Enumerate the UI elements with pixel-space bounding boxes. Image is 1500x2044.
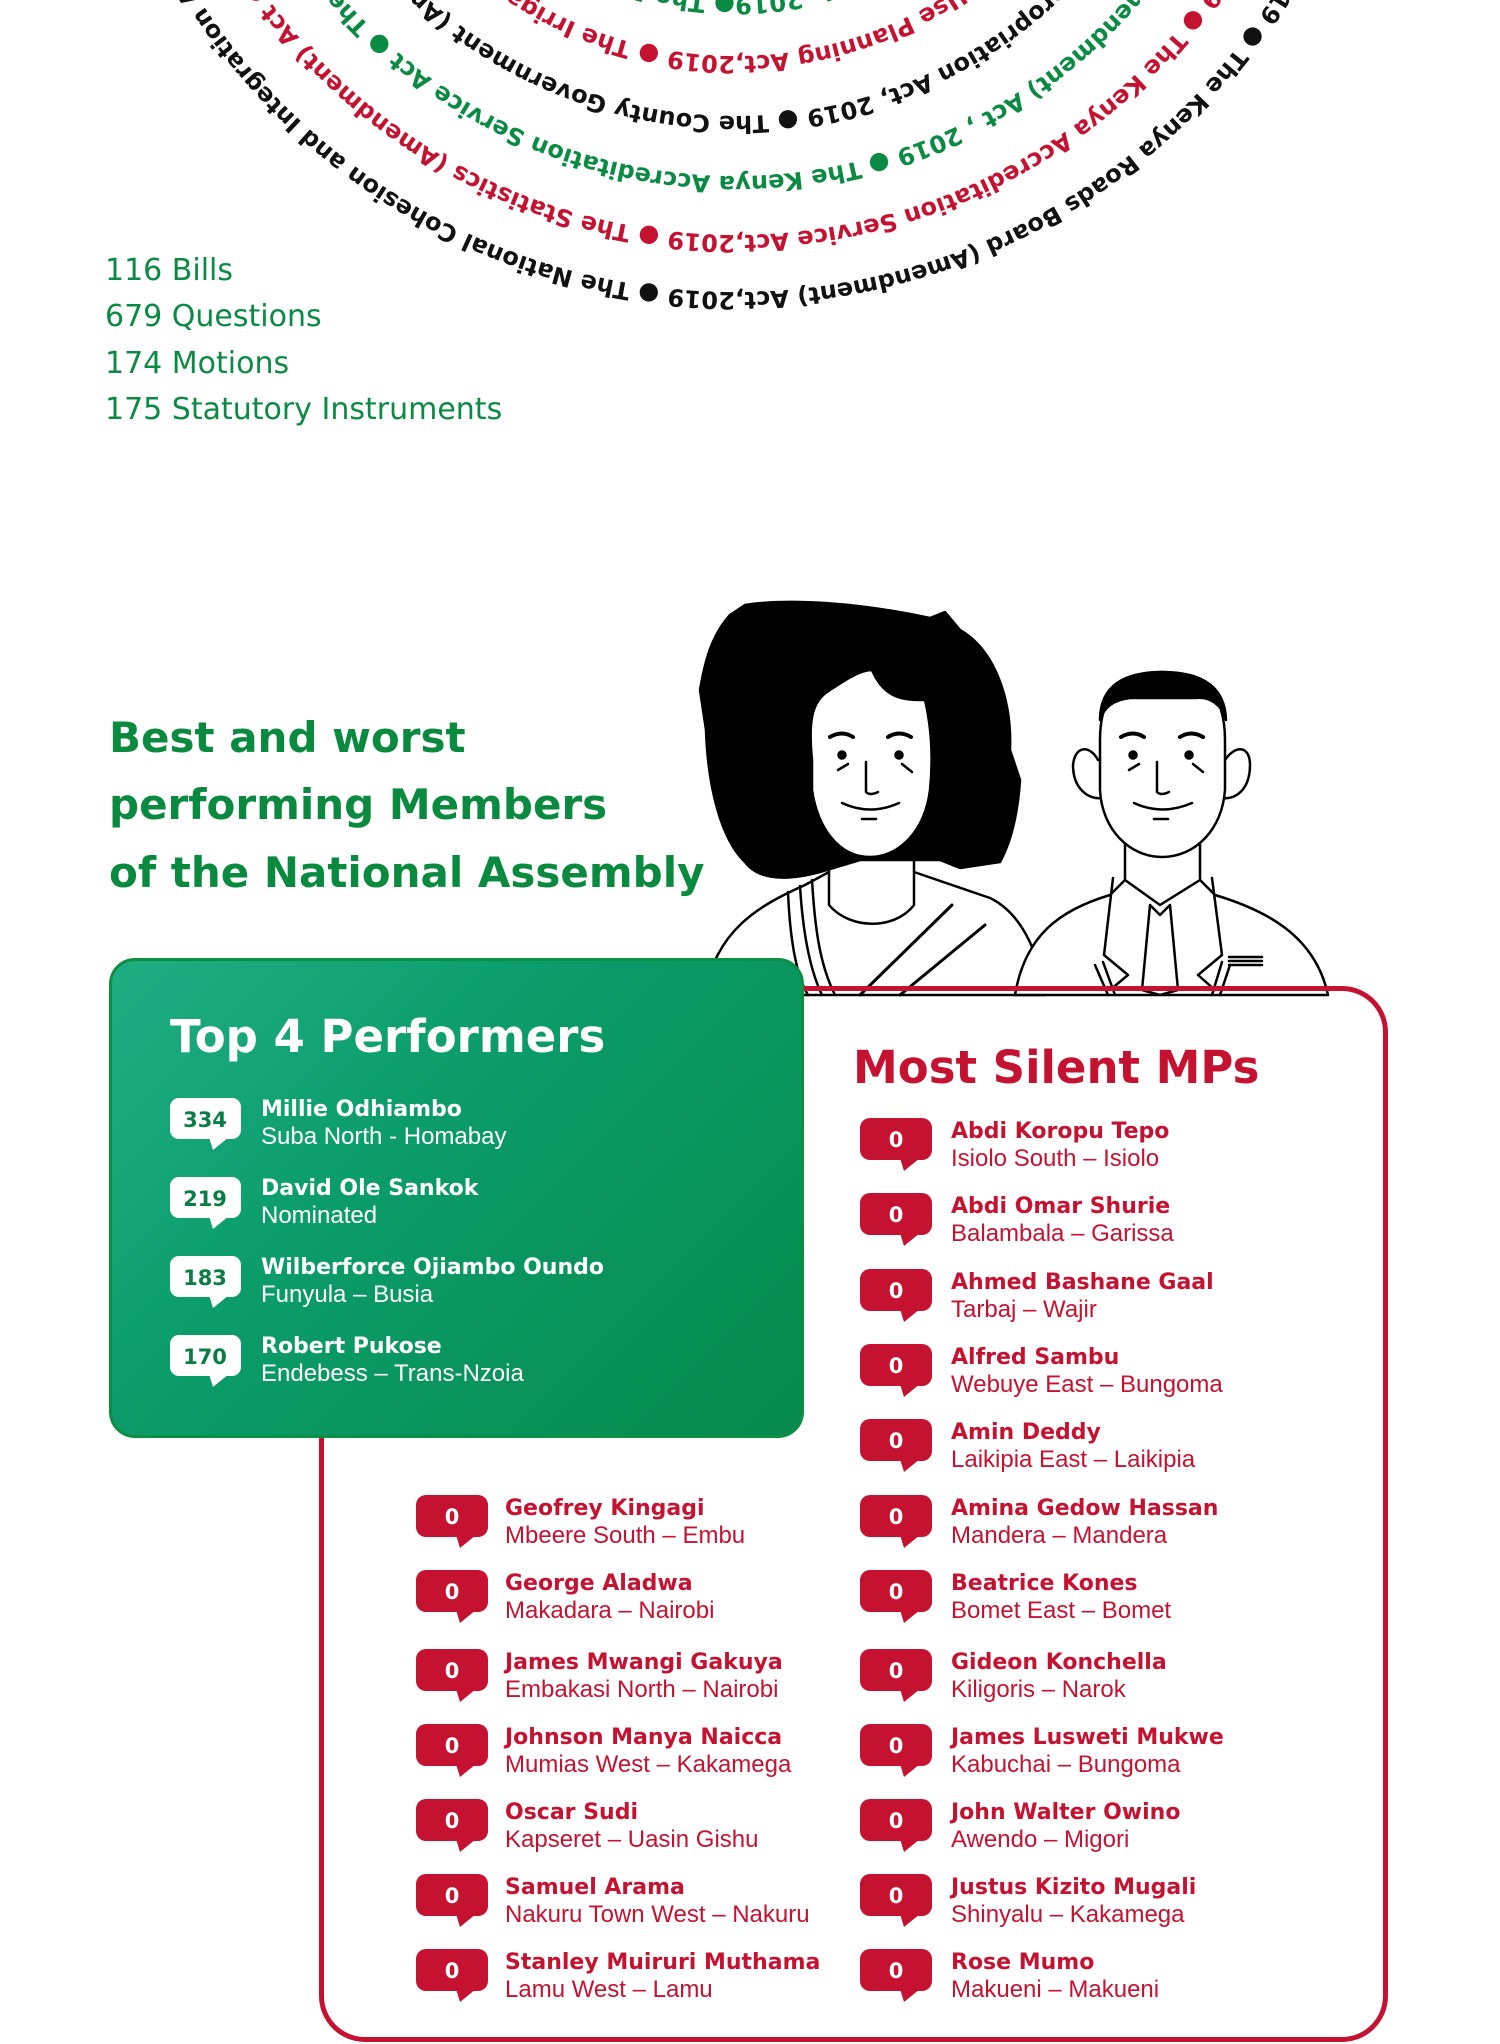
stats list: 174 Motions [105, 346, 289, 381]
list: silent MPs right column: Tarbaj – Wajir [951, 1296, 1097, 1323]
list: silent MPs right column: Abdi Koropu Tepo [951, 1119, 1169, 1144]
performer 1: 334 [183, 1108, 227, 1132]
list: silent MPs left column: George Aladwa [505, 1571, 693, 1596]
list: silent MPs right column: Bomet East – Bomet [951, 1597, 1171, 1624]
list: silent MPs left column: Oscar Sudi [505, 1800, 638, 1825]
list: silent MPs right column: Abdi Omar Shurie [951, 1194, 1170, 1219]
list: silent MPs left column: 0 [445, 1659, 459, 1683]
performer 3: 183 [183, 1266, 227, 1290]
performer 4: Endebess – Trans-Nzoia [261, 1360, 524, 1387]
list: silent MPs left column: Samuel Arama [505, 1875, 685, 1900]
list: silent MPs right column: 0 [889, 1734, 903, 1758]
list: silent MPs right column: Awendo – Migori [951, 1826, 1129, 1853]
list: silent MPs right column: 0 [889, 1203, 903, 1227]
stats list [105, 253, 502, 427]
performer 3: Wilberforce Ojiambo Oundo [261, 1255, 604, 1280]
list: silent MPs right column: Makueni – Makueni [951, 1976, 1159, 2003]
list: silent MPs right column: Beatrice Kones [951, 1571, 1138, 1596]
illustration: two MPs [698, 600, 1330, 997]
list: silent MPs right column: Amina Gedow Hassan [951, 1496, 1218, 1521]
woman [700, 602, 1045, 995]
list: silent MPs right column: Balambala – Garissa [951, 1220, 1174, 1247]
list: silent MPs left column: Kapseret – Uasin Gishu [505, 1826, 758, 1853]
list: silent MPs left column: Lamu West – Lamu [505, 1976, 713, 2003]
list: silent MPs right column: 0 [889, 1354, 903, 1378]
list: silent MPs right column: Kiligoris – Narok [951, 1676, 1126, 1703]
stats list: 116 Bills [105, 253, 233, 288]
list: silent MPs right column: Mandera – Mandera [951, 1522, 1167, 1549]
list: silent MPs left column: Mumias West – Kakamega [505, 1751, 791, 1778]
list: silent MPs left column [416, 1495, 820, 2003]
heading: Best and worst [109, 713, 466, 762]
man [1015, 672, 1328, 995]
stats list: 679 Questions [105, 299, 322, 334]
list: silent MPs right column: Rose Mumo [951, 1950, 1094, 1975]
list: silent MPs left column: Nakuru Town West – Nakuru [505, 1901, 810, 1928]
performer 2 [170, 1176, 479, 1229]
list: silent MPs right column: Gideon Konchella [951, 1650, 1167, 1675]
list: silent MPs left column: Mbeere South – Embu [505, 1522, 745, 1549]
list: silent MPs left column: 0 [445, 1505, 459, 1529]
list: silent MPs right column: 0 [889, 1580, 903, 1604]
list: silent MPs left column: 0 [445, 1809, 459, 1833]
performer 2: Nominated [261, 1202, 377, 1229]
list: silent MPs right column: Laikipia East – Laikipia [951, 1446, 1195, 1473]
list: silent MPs left column: Stanley Muiruri Muthama [505, 1950, 820, 1975]
list: silent MPs left column: 0 [445, 1959, 459, 1983]
list: silent MPs left column: Embakasi North – Nairobi [505, 1676, 778, 1703]
performer 4 [170, 1334, 524, 1387]
list: silent MPs right column: 0 [889, 1429, 903, 1453]
list: silent MPs right column: James Lusweti Mukwe [951, 1725, 1224, 1750]
heading: performing Members [109, 780, 607, 829]
list: silent MPs right column: John Walter Owino [951, 1800, 1180, 1825]
list: silent MPs right column: 0 [889, 1279, 903, 1303]
stats list: 175 Statutory Instruments [105, 392, 502, 427]
list: silent MPs right column: Webuye East – Bungoma [951, 1371, 1223, 1398]
arc of acts [179, 0, 1290, 310]
list: silent MPs right column: Ahmed Bashane Gaal [951, 1270, 1214, 1295]
heading [109, 713, 705, 897]
panel: most silent MPs (red outline) [319, 986, 1388, 2042]
performer 1 [170, 1097, 506, 1150]
heading: Top 4 Performers: Top 4 Performers [170, 1010, 605, 1063]
list: silent MPs right column: Isiolo South – Isiolo [951, 1145, 1159, 1172]
list: silent MPs left column: Geofrey Kingagi [505, 1496, 705, 1521]
list: silent MPs left column: Makadara – Nairobi [505, 1597, 714, 1624]
performer 3 [170, 1255, 604, 1308]
list: silent MPs left column: 0 [445, 1884, 459, 1908]
list: silent MPs left column: James Mwangi Gakuya [505, 1650, 783, 1675]
list: silent MPs right column: Shinyalu – Kakamega [951, 1901, 1184, 1928]
list: silent MPs right column: 0 [889, 1809, 903, 1833]
list: silent MPs left column: 0 [445, 1580, 459, 1604]
list: silent MPs right column: Kabuchai – Bungoma [951, 1751, 1180, 1778]
list: silent MPs right column: 0 [889, 1505, 903, 1529]
heading: of the National Assembly [109, 848, 705, 897]
list: silent MPs right column: 0 [889, 1128, 903, 1152]
performer 2: David Ole Sankok [261, 1176, 478, 1201]
performer 1: Suba North - Homabay [261, 1123, 506, 1150]
list: silent MPs right column: Alfred Sambu [951, 1345, 1119, 1370]
list: silent MPs left column: 0 [445, 1734, 459, 1758]
performer 4: 170 [183, 1345, 227, 1369]
performer 1: Millie Odhiambo [261, 1097, 462, 1122]
list: silent MPs right column: 0 [889, 1659, 903, 1683]
list: silent MPs right column: Amin Deddy [951, 1420, 1101, 1445]
list: silent MPs right column: Justus Kizito Mugali [951, 1875, 1196, 1900]
list: silent MPs left column: Johnson Manya Naicca [505, 1725, 782, 1750]
list: silent MPs right column [860, 1118, 1224, 2003]
performer 3: Funyula – Busia [261, 1281, 433, 1308]
list: silent MPs right column: 0 [889, 1884, 903, 1908]
performer 2: 219 [183, 1187, 227, 1211]
performer 4: Robert Pukose [261, 1334, 442, 1359]
list: silent MPs right column: 0 [889, 1959, 903, 1983]
heading: Most Silent MPs: Most Silent MPs [853, 1041, 1259, 1094]
panel: top 4 performers [109, 958, 804, 1438]
